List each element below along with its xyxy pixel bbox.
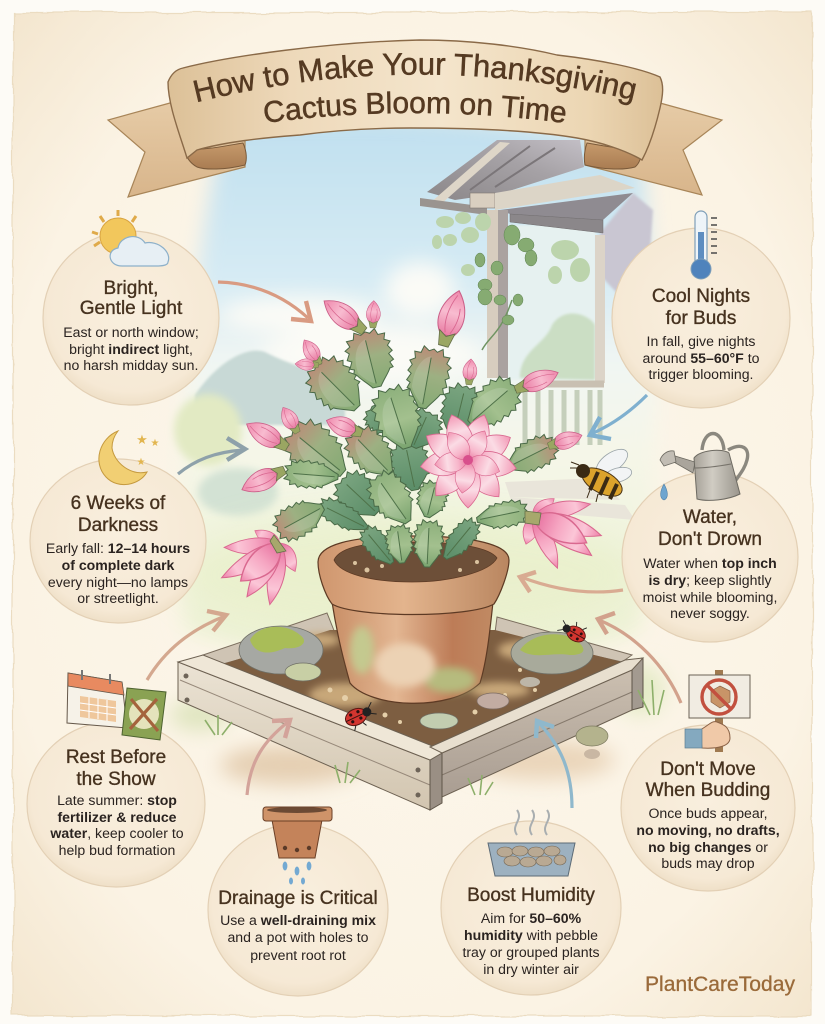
text block: buds may drop xyxy=(661,855,755,871)
ladybug on bed xyxy=(343,701,379,733)
heading: Boost Humidity xyxy=(467,885,595,906)
icon: moon and stars: ★ xyxy=(136,433,148,448)
text block: Early fall: 12–14 hours xyxy=(46,540,190,556)
garden scene backdrop xyxy=(170,114,665,785)
end post xyxy=(632,658,643,710)
arrow: darkness to plant xyxy=(178,438,245,474)
icon: moon and stars: ★ xyxy=(151,438,160,449)
arrow: cool nights to plant xyxy=(590,395,647,439)
arrow: humidity to bed xyxy=(536,721,572,808)
panel: boost humidity xyxy=(441,810,621,995)
text block: In fall, give nights xyxy=(647,333,755,349)
back walls xyxy=(203,613,335,664)
panel: bright gentle light xyxy=(43,210,219,405)
heading: Don't Drown xyxy=(658,529,762,550)
panel: rest before the show xyxy=(27,670,205,887)
mossy rocks and pebbles xyxy=(239,626,608,759)
arrow: do not move to bed xyxy=(598,613,681,703)
distant bush xyxy=(520,313,595,380)
heading: When Budding xyxy=(646,780,770,801)
posts xyxy=(487,210,498,378)
distant hills xyxy=(195,351,345,425)
arrow: light to plant xyxy=(218,282,311,321)
panel: water, don't drown xyxy=(622,434,798,642)
text block: of complete dark xyxy=(62,557,175,573)
text block: humidity with pebble xyxy=(464,927,598,943)
porch xyxy=(420,140,653,520)
text block: prevent root rot xyxy=(250,947,346,963)
grass tufts xyxy=(205,680,664,795)
hanging flower right xyxy=(521,493,604,571)
icon: pebble tray with steam xyxy=(488,810,575,876)
flower buds xyxy=(238,287,585,499)
text block: and a pot with holes to xyxy=(227,929,369,945)
title text: Cactus Bloom on Time xyxy=(264,91,566,123)
railing xyxy=(522,384,604,445)
heading: Don't Move xyxy=(660,759,756,780)
text block: Aim for 50–60% xyxy=(481,910,581,926)
text block: moist while blooming, xyxy=(643,589,777,605)
arrow: rest to plant xyxy=(147,611,226,680)
vine xyxy=(432,212,590,350)
heading: for Buds xyxy=(666,308,736,329)
text block: no moving, no drafts, xyxy=(636,822,780,838)
text block: water, keep cooler to xyxy=(50,825,184,841)
panel: six weeks of darkness xyxy=(30,431,206,623)
ribbon body xyxy=(168,40,663,160)
text block: fertilizer & reduce xyxy=(57,809,177,825)
bee xyxy=(570,444,633,502)
icon: calendar xyxy=(67,670,127,728)
text block: no big changes or xyxy=(648,839,768,855)
ground wash xyxy=(170,665,665,785)
title text: How to Make Your Thanksgiving xyxy=(193,53,636,106)
ladybug on rock xyxy=(557,616,590,645)
cactus segments xyxy=(268,326,562,570)
icon: no-moving sign xyxy=(685,670,750,752)
heading: Rest Before xyxy=(66,747,166,768)
text block: Use a well-draining mix xyxy=(220,912,376,928)
bushes xyxy=(174,394,278,516)
hanging flower left xyxy=(218,526,303,606)
nails xyxy=(184,674,420,798)
icon: fertilizer packet xyxy=(122,688,166,740)
heading: Drainage is Critical xyxy=(218,888,378,909)
text block: Late summer: stop xyxy=(57,792,177,808)
soil inside pot xyxy=(334,542,497,582)
opening behind posts xyxy=(508,225,596,380)
terracotta pot xyxy=(318,536,509,703)
roof front beams xyxy=(420,198,487,215)
raised wooden garden bed xyxy=(178,613,664,810)
heading: Water, xyxy=(683,507,737,528)
right fold xyxy=(584,143,642,169)
arrow: water to pot xyxy=(520,572,623,592)
text block: around 55–60°F to xyxy=(643,350,759,366)
title ribbon xyxy=(106,39,724,198)
steps xyxy=(505,478,635,520)
text block: Once buds appear, xyxy=(648,805,768,821)
text block: trigger blooming. xyxy=(649,366,753,382)
heading: Bright, xyxy=(104,278,158,299)
left fold xyxy=(185,143,246,169)
icon: watering can xyxy=(660,434,748,500)
heading: 6 Weeks of xyxy=(71,493,166,514)
right tail xyxy=(585,103,722,195)
text block: help bud formation xyxy=(59,842,175,858)
top rims xyxy=(178,655,442,760)
text block: bright indirect light, xyxy=(69,341,193,357)
text block: Water when top inch xyxy=(643,555,777,571)
right front board xyxy=(442,670,632,797)
panel: drainage is critical xyxy=(208,807,388,996)
corner post xyxy=(430,753,442,810)
text block: or streetlight. xyxy=(77,590,159,606)
text block: tray or grouped plants xyxy=(462,944,600,960)
arrow: drainage to bed xyxy=(247,720,290,795)
text block: in dry winter air xyxy=(483,961,579,977)
left tail xyxy=(108,103,245,197)
left front board xyxy=(178,662,430,810)
text block: never soggy. xyxy=(670,605,750,621)
brand label: PlantCareToday xyxy=(645,973,795,996)
icon: thermometer xyxy=(691,211,717,279)
icon: moon and stars xyxy=(99,431,160,485)
heading: the Show xyxy=(76,769,156,790)
text block: no harsh midday sun. xyxy=(64,357,198,373)
sky xyxy=(180,114,655,660)
roof xyxy=(427,140,584,200)
icon: pot with drainage holes xyxy=(263,807,332,884)
open flower xyxy=(419,411,518,508)
heading: Cool Nights xyxy=(652,286,750,307)
heading: Gentle Light xyxy=(80,298,183,319)
text block: East or north window; xyxy=(63,324,199,340)
pot rim xyxy=(318,536,509,614)
pot body xyxy=(332,602,493,703)
porch far wall wash xyxy=(598,193,653,293)
text block: is dry; keep slightly xyxy=(648,572,772,588)
heading: Darkness xyxy=(78,515,158,536)
soil xyxy=(223,630,622,747)
icon: sun and cloud xyxy=(92,210,169,266)
clouds xyxy=(220,262,480,383)
text block: every night—no lamps xyxy=(48,574,188,590)
panel: don't move when budding xyxy=(621,670,795,891)
icon: moon and stars: ★ xyxy=(137,457,146,468)
panel: cool nights for buds xyxy=(612,211,790,408)
lawn xyxy=(180,515,640,635)
Thanksgiving cactus xyxy=(218,287,604,606)
